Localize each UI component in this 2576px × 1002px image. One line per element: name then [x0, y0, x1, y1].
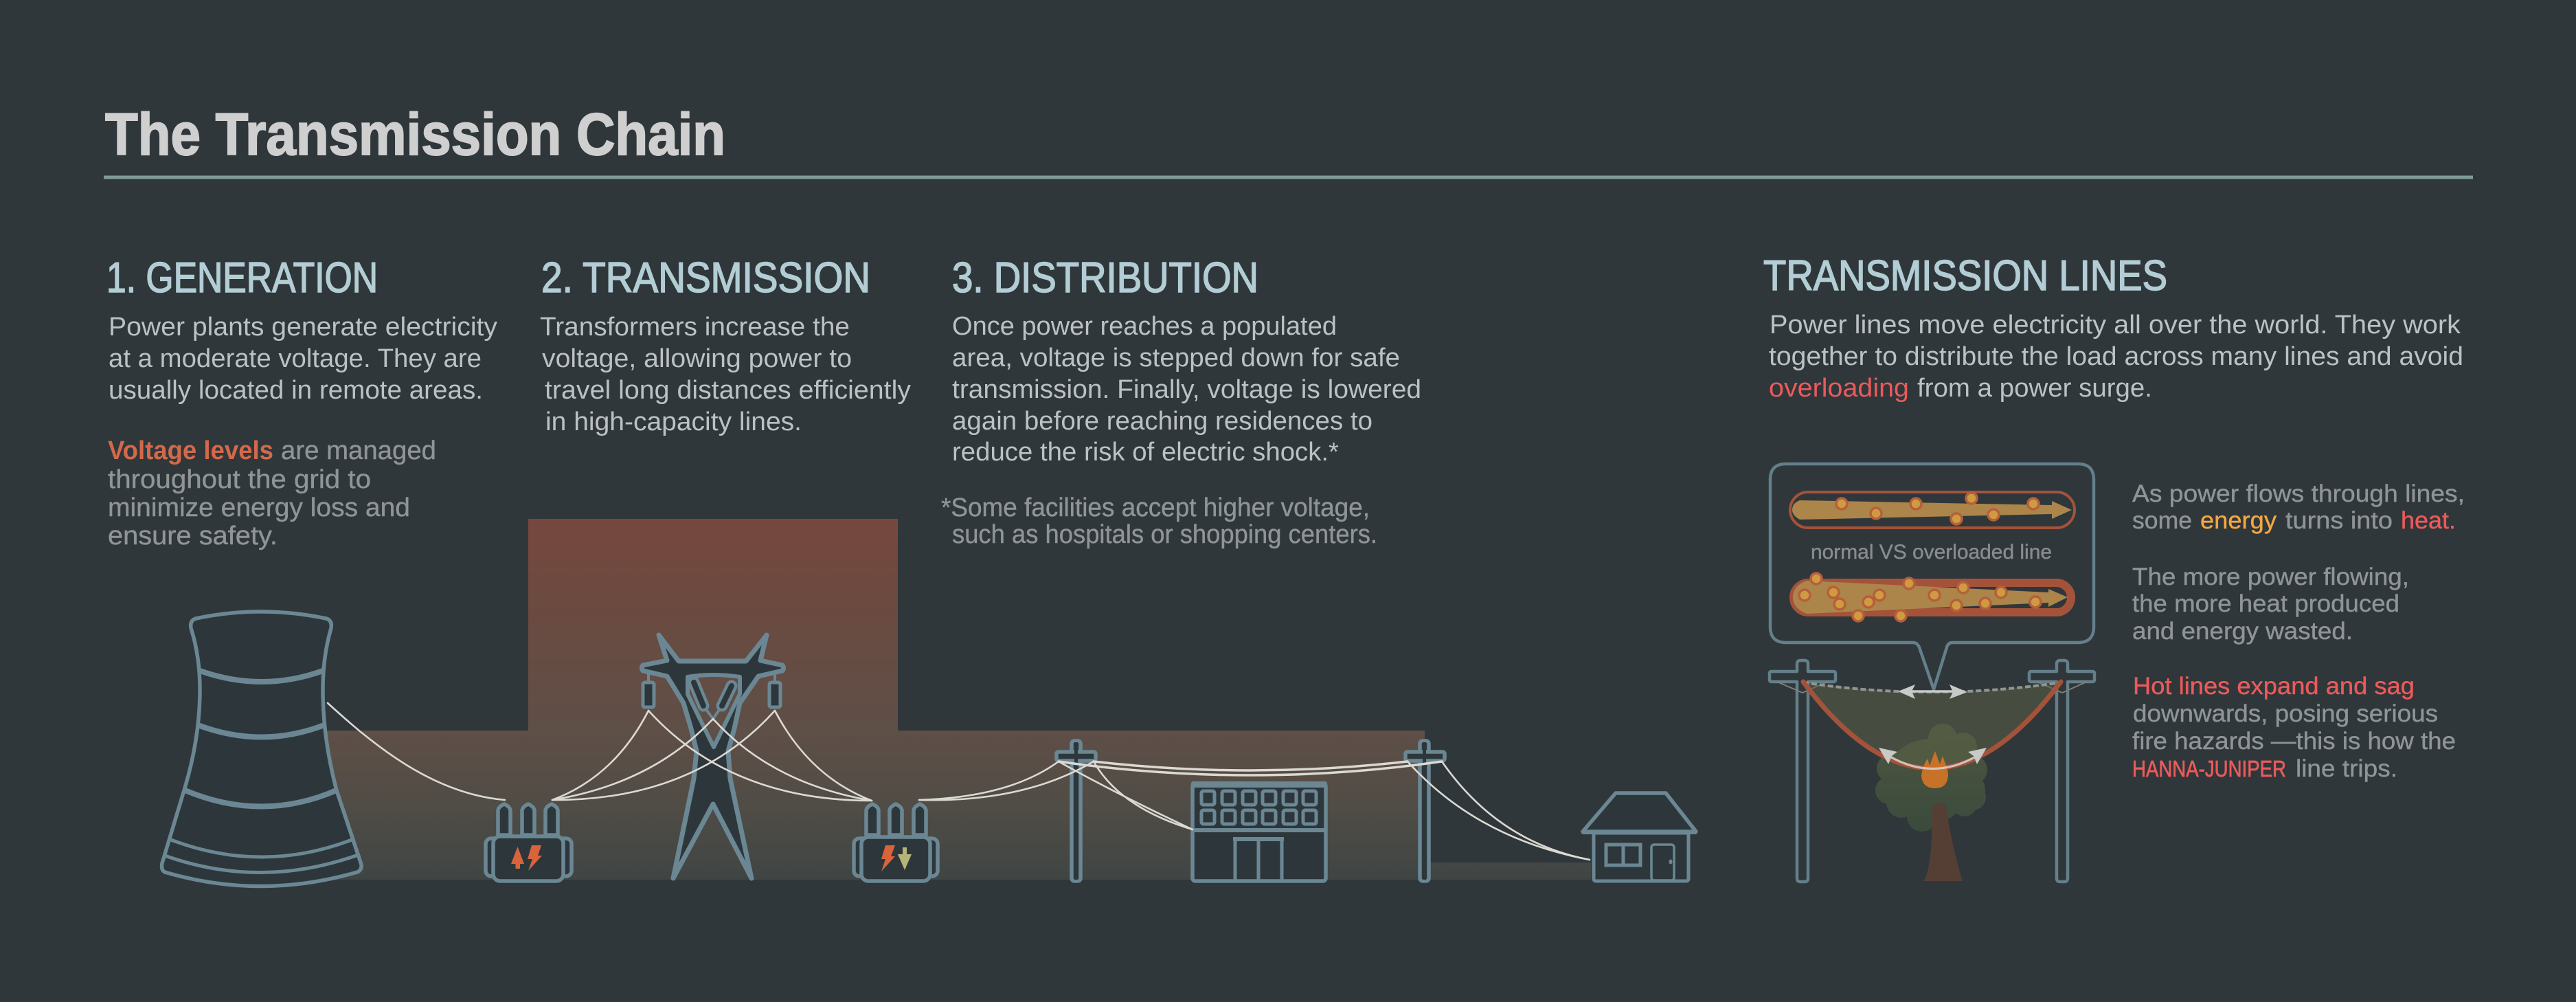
text block: transmission: travel long distances efficiently	[545, 376, 911, 405]
text block: fire hazard: Hot lines expand and sag	[2133, 673, 2415, 700]
text block: transmission lines intro: Power lines move electricity all over the world. They work	[1770, 311, 2461, 339]
text block: fire hazard: HANNA-JUNIPER	[2132, 756, 2286, 781]
text block: generation: are managed	[281, 436, 436, 465]
text block: generation: Power plants generate electricity	[109, 313, 497, 342]
icon: distribution pole 1	[1057, 741, 1096, 881]
text block: transmission lines intro	[1763, 252, 2463, 403]
text block: distribution: transmission. Finally, voltage is lowered	[952, 375, 1421, 404]
text block: heat explanation: and energy wasted.	[2132, 618, 2353, 645]
text block: generation	[106, 254, 497, 550]
heading: distribution: 3. DISTRIBUTION	[952, 254, 1258, 302]
text block: heat explanation: heat.	[2401, 507, 2456, 534]
text block: transmission: in high-capacity lines.	[545, 408, 802, 436]
gradient voltage backdrop	[323, 519, 1591, 880]
dotted normal line	[1803, 682, 2061, 692]
text block: transmission lines intro: overloading	[1769, 374, 1909, 403]
text block: generation: ensure safety.	[108, 522, 278, 550]
sag zone	[1803, 682, 2061, 768]
text block: generation: at a moderate voltage. They are	[109, 344, 482, 373]
text block: distribution: reduce the risk of electric shock.*	[952, 438, 1339, 467]
text block: fire hazard: line trips.	[2296, 755, 2397, 782]
text block: transmission lines intro: together to distribute the load across many lines and avoid	[1769, 342, 2463, 371]
text block: transmission	[540, 254, 911, 436]
text block: heat explanation: turns into	[2285, 507, 2393, 534]
overloaded line	[1793, 573, 2071, 621]
text block: fire hazard: downwards, posing serious	[2133, 700, 2438, 727]
icon: step-down transformer	[854, 804, 938, 881]
heading: generation: 1. GENERATION	[106, 254, 378, 302]
text block: fire hazard	[2132, 673, 2456, 782]
text block: distribution: such as hospitals or shopping centers.	[952, 520, 1377, 549]
heading: transmission: 2. TRANSMISSION	[541, 254, 870, 302]
text block: generation: Voltage levels	[108, 436, 273, 465]
text block: distribution: again before reaching residences to	[952, 407, 1372, 436]
text block: heat explanation: some	[2132, 507, 2192, 534]
text block: fire hazard: fire hazards —this is how the	[2132, 728, 2456, 755]
power wires	[328, 703, 1590, 860]
icon: transmission tower	[642, 635, 783, 878]
text block: distribution	[941, 254, 1421, 549]
callout: normal vs overloaded line	[1770, 464, 2094, 689]
text block: heat explanation: energy	[2200, 507, 2277, 534]
title: The Transmission Chain	[105, 102, 725, 168]
text block: generation: minimize energy loss and	[108, 493, 410, 522]
text block: generation: usually located in remote areas.	[109, 376, 483, 405]
text block: distribution: *Some facilities accept higher voltage,	[941, 493, 1370, 522]
normal line	[1790, 492, 2075, 528]
text block: heat explanation: The more power flowing,	[2132, 564, 2409, 590]
icon: house	[1581, 793, 1697, 881]
text block: transmission: voltage, allowing power to	[542, 344, 852, 373]
icon: distribution pole 2	[1405, 741, 1445, 881]
sagging hot line	[1803, 682, 2061, 768]
text block: transmission: Transformers increase the	[540, 313, 850, 342]
text block: heat explanation	[2132, 480, 2465, 645]
text block: transmission lines intro: from a power surge.	[1917, 374, 2152, 403]
arrow: horizontal expansion	[1898, 684, 1967, 699]
text block: distribution: area, voltage is stepped down for safe	[952, 344, 1400, 372]
icon: commercial building	[1191, 781, 1327, 881]
text block: heat explanation: As power flows through lines,	[2132, 480, 2465, 507]
icon: tree	[1875, 724, 1987, 881]
arrow: sag expansion	[1879, 748, 1987, 768]
text block: heat explanation: the more heat produced	[2132, 590, 2399, 617]
callout label: normal VS overloaded line	[1811, 541, 2052, 564]
heading: transmission lines: TRANSMISSION LINES	[1763, 252, 2167, 300]
icon: cooling tower	[162, 612, 361, 887]
text block: generation: throughout the grid to	[108, 465, 371, 494]
icon: step-up transformer	[486, 804, 572, 881]
icon: sag diagram poles	[1770, 660, 2094, 882]
icon: flame	[1921, 751, 1948, 788]
text block: distribution: Once power reaches a populated	[952, 312, 1337, 341]
